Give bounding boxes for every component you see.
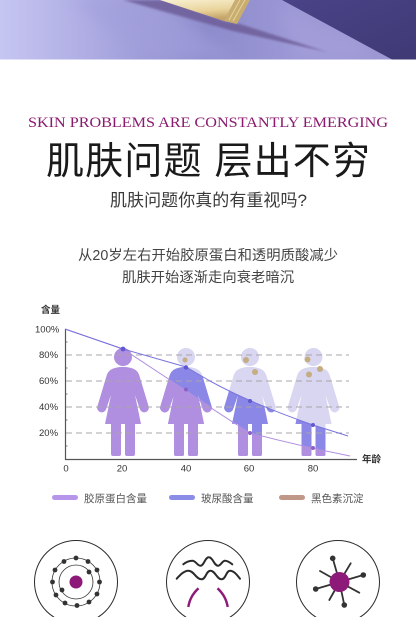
y axis labels: 40% (39, 402, 59, 413)
intro text (78, 247, 338, 286)
grid lines (66, 355, 349, 433)
axes (66, 329, 357, 460)
x axis labels (63, 454, 381, 474)
figure age 40 (160, 348, 212, 456)
chart: collagen and hyaluronic acid decline with age (35, 304, 381, 474)
subtitle: 肌肤问题你真的有重视吗? (110, 191, 307, 210)
hyaluronic acid curve (65, 329, 348, 436)
y axis labels: 60% (39, 376, 59, 387)
intro text: 肌肤开始逐渐走向衰老暗沉 (122, 269, 294, 286)
figure age 80 (288, 348, 339, 456)
y axis labels: 含量 (41, 304, 61, 316)
main title: 肌肤问题 层出不穷 (46, 141, 370, 183)
icon: wrinkles (166, 540, 250, 617)
y axis labels (35, 304, 61, 439)
legend: collagen: 胶原蛋白含量 (84, 492, 147, 505)
x axis labels: 80 (308, 464, 318, 474)
y axis labels: 20% (39, 428, 59, 439)
x axis labels: 20 (117, 464, 127, 474)
x axis labels: 40 (181, 464, 191, 474)
icon: melanin cell (296, 540, 380, 617)
legend: hyaluronic acid: 玻尿酸含量 (201, 492, 254, 505)
curve points (121, 347, 315, 450)
y axis labels: 80% (39, 350, 59, 361)
y axis labels: 100% (35, 324, 60, 336)
banner: product photo background (0, 0, 416, 60)
x axis labels: 0 (63, 464, 69, 474)
x axis labels: 年龄 (362, 454, 381, 466)
x axis labels: 60 (244, 464, 254, 474)
English heading: SKIN PROBLEMS ARE CONSTANTLY EMERGING (28, 115, 389, 131)
legend: collagen (52, 492, 147, 505)
legend: hyaluronic acid (169, 492, 254, 505)
legend (52, 492, 364, 505)
collagen curve (65, 329, 350, 456)
legend: melanin (279, 492, 364, 505)
icon: collagen structure (34, 540, 118, 617)
figure age 20 (97, 348, 149, 456)
figure age 60 (224, 348, 276, 456)
intro text: 从20岁左右开始胶原蛋白和透明质酸减少 (78, 247, 338, 264)
legend: melanin: 黑色素沉淀 (311, 492, 364, 505)
